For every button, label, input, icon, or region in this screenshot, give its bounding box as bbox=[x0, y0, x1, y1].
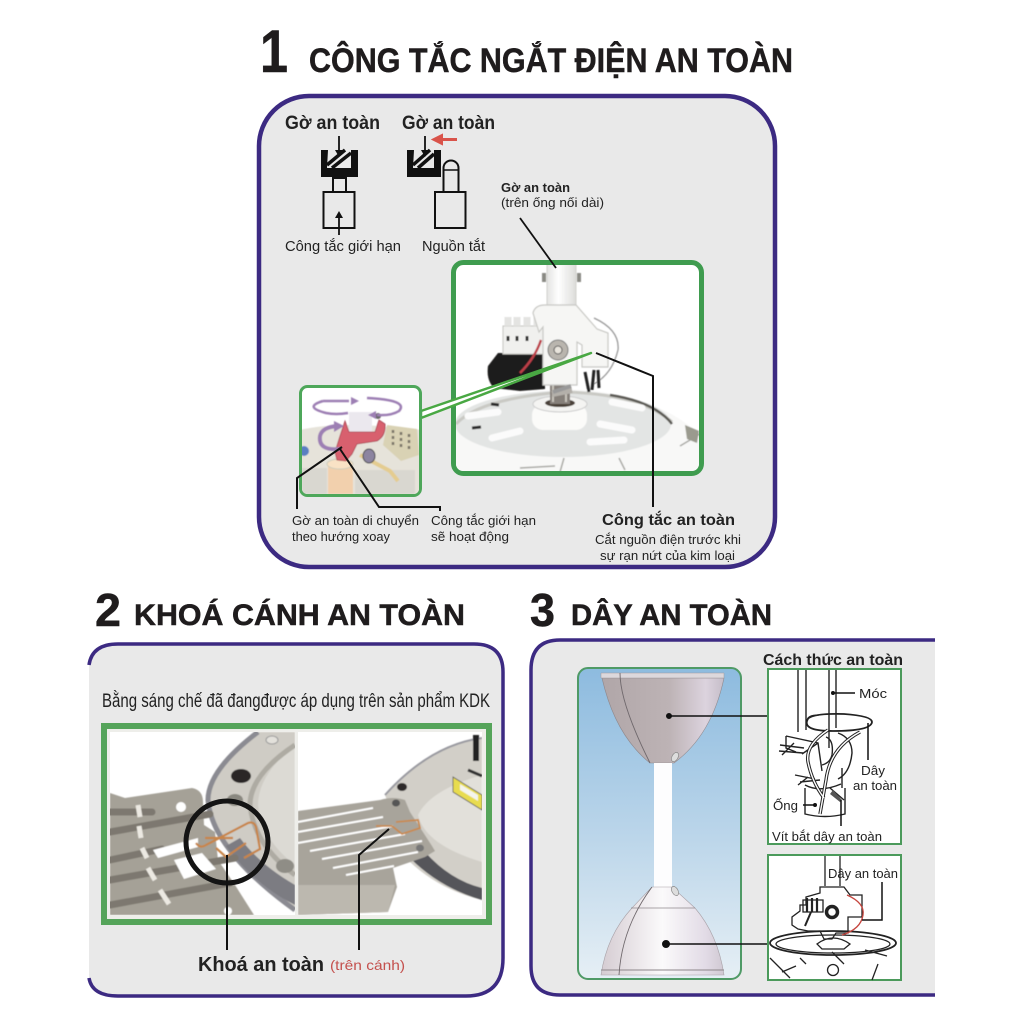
diagram: hook and safety wire detail bbox=[768, 669, 901, 844]
photo: limit switch inset in green frame bbox=[299, 386, 422, 496]
label: limit switch activates: sẽ hoạt động bbox=[431, 529, 509, 544]
diagram: safety wire on motor: Dây an toàn bbox=[828, 866, 898, 881]
label: safety lock on blade bbox=[198, 954, 405, 976]
label: limit switch activates: Công tắc giới hạn bbox=[431, 513, 536, 528]
diagram: hook and safety wire detail: Dây bbox=[861, 763, 886, 778]
heading: section 3: 3 bbox=[530, 584, 555, 636]
label: safety switch: Công tắc an toàn bbox=[602, 510, 735, 529]
label: flange moves in rotation direction: Gờ an toàn di chuyển bbox=[292, 513, 419, 528]
label: flange on extension pipe: (trên ống nối dài) bbox=[501, 195, 604, 210]
heading: how safety works: Cách thức an toàn bbox=[763, 652, 903, 669]
schematic: limit switch released, power off: Nguồn tắt bbox=[422, 238, 486, 255]
diagram: hook and safety wire detail: Móc bbox=[859, 686, 888, 701]
label: safety switch: Cắt nguồn điện trước khi bbox=[595, 532, 741, 547]
heading: section 1: CÔNG TẮC NGẮT ĐIỆN AN TOÀN bbox=[309, 41, 793, 80]
schematic: limit switch released, power off bbox=[402, 113, 495, 255]
photo: fan motor close-up in green frame bbox=[452, 262, 705, 475]
text: patent note: Bằng sáng chế đã đangđược áp dụng trên sản phẩm KDK bbox=[102, 690, 490, 712]
heading: section 2: KHOÁ CÁNH AN TOÀN bbox=[134, 598, 465, 632]
leader lines from fan to details bbox=[662, 714, 770, 948]
panel: safety wire bbox=[531, 640, 935, 995]
photo frame: blade lock images bbox=[104, 726, 489, 922]
diagram: hook and safety wire detail: Ống bbox=[773, 798, 798, 813]
photo: left close-up of lock bbox=[110, 732, 295, 915]
connector: green zoom line between photos bbox=[421, 353, 591, 418]
diagram: hook and safety wire detail: Vít bắt dây an toàn bbox=[772, 829, 882, 844]
heading: section 2: 2 bbox=[95, 584, 121, 636]
schematic: limit switch engaged: Gờ an toàn bbox=[285, 113, 380, 134]
label: safety switch bbox=[595, 510, 741, 563]
heading: section 3 bbox=[530, 584, 772, 636]
heading: section 1: 1 bbox=[260, 18, 288, 85]
leader lines bbox=[227, 829, 389, 950]
heading: section 3: DÂY AN TOÀN bbox=[571, 598, 772, 632]
label: safety switch: sự rạn nứt của kim loại bbox=[600, 548, 735, 563]
panel: safety cut-off switch bbox=[259, 96, 775, 567]
diagram: safety wire on motor bbox=[768, 855, 901, 980]
illustration: hanging fan extension on blue background bbox=[578, 668, 741, 979]
photo: right view of blade with lock bbox=[298, 732, 482, 915]
label: safety lock on blade: Khoá an toàn bbox=[198, 954, 324, 976]
schematic: limit switch engaged bbox=[285, 113, 401, 255]
heading: section 1 bbox=[260, 18, 793, 85]
label: flange on extension pipe bbox=[501, 180, 604, 210]
label: flange moves in rotation direction: theo hướng xoay bbox=[292, 529, 390, 544]
schematic: limit switch released, power off: Gờ an toàn bbox=[402, 113, 495, 134]
schematic: limit switch engaged: Công tắc giới hạn bbox=[285, 238, 401, 255]
diagram: hook and safety wire detail: an toàn bbox=[853, 778, 897, 793]
leader lines bbox=[297, 218, 653, 511]
lock highlight circle bbox=[186, 801, 268, 883]
label: safety lock on blade: (trên cánh) bbox=[330, 957, 405, 973]
panel: blade safety lock bbox=[89, 644, 503, 996]
heading: section 2 bbox=[95, 584, 465, 636]
label: flange on extension pipe: Gờ an toàn bbox=[501, 180, 570, 195]
